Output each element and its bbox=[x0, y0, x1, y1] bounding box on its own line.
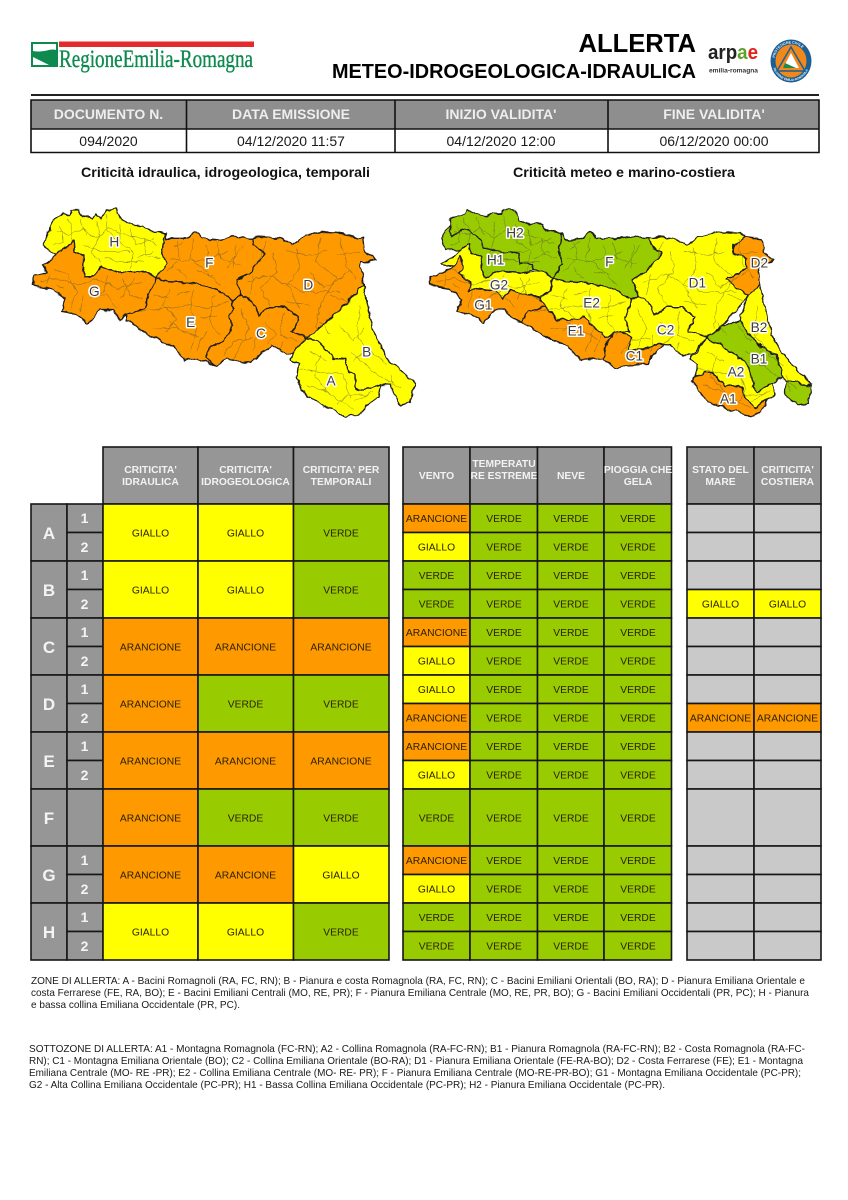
table: zone labels: 1 bbox=[81, 681, 89, 697]
table: vento, temperature estreme, neve, pioggia che gela: VERDE bbox=[553, 913, 589, 924]
heading: left map: Criticità idraulica, idrogeologica, temporali bbox=[81, 164, 370, 180]
map: criticità meteo e marino-costiera: B2 bbox=[751, 320, 767, 335]
table: vento, temperature estreme, neve, pioggia che gela: VERDE bbox=[553, 600, 589, 610]
table: idraulica, idrogeologica, temporali: GIALLO bbox=[132, 586, 169, 596]
map: criticità meteo e marino-costiera: G1 bbox=[474, 297, 492, 312]
text block: sottozone di allerta: SOTTOZONE DI ALLERTA: A1 - Montagna Romagnola (FC-RN); A2 - Collina Romagnola (RA-FC-RN); B1 - Pianura Romagnola (RA-FC-RN); B2 - Costa Romagnola (RA-FC- bbox=[29, 1044, 805, 1055]
logo: protezione civile: REGIONE EMILIA-ROMAGNA bbox=[773, 68, 808, 81]
table: zone labels: D bbox=[43, 695, 55, 714]
table: zone labels: E bbox=[43, 752, 55, 771]
map: criticità idraulica, idrogeologica, temporali: B bbox=[362, 345, 371, 360]
map: criticità meteo e marino-costiera: D1 bbox=[689, 275, 706, 290]
map: criticità meteo e marino-costiera: E1 bbox=[568, 324, 584, 339]
table: idraulica, idrogeologica, temporali: GIALLO bbox=[227, 528, 264, 540]
logo: Regione Emilia-Romagna bbox=[31, 42, 254, 73]
table: idraulica, idrogeologica, temporali: GIALLO bbox=[132, 528, 169, 540]
logo: arpae: arpae bbox=[708, 42, 758, 64]
map: criticità meteo e marino-costiera: A1 bbox=[720, 391, 737, 406]
table: vento, temperature estreme, neve, pioggia che gela: VERDE bbox=[620, 600, 656, 610]
table: zone labels: 1 bbox=[81, 567, 89, 583]
table: vento, temperature estreme, neve, pioggia che gela: VERDE bbox=[553, 542, 589, 554]
table: vento, temperature estreme, neve, pioggia che gela: VERDE bbox=[553, 656, 589, 668]
document info table bbox=[31, 100, 819, 152]
subzone F bbox=[553, 231, 662, 300]
table: vento, temperature estreme, neve, pioggia che gela: VERDE bbox=[620, 685, 656, 696]
table: vento, temperature estreme, neve, pioggia che gela bbox=[403, 447, 672, 960]
table: zone labels: 2 bbox=[81, 539, 89, 555]
table: idraulica, idrogeologica, temporali: ARANCIONE bbox=[215, 642, 276, 654]
table: idraulica, idrogeologica, temporali: ARANCIONE bbox=[120, 870, 181, 882]
table: vento, temperature estreme, neve, pioggia che gela: VERDE bbox=[553, 942, 589, 952]
table: vento, temperature estreme, neve, pioggia che gela: NEVE bbox=[557, 471, 585, 482]
subzone G1 bbox=[430, 257, 547, 323]
logo: Regione Emilia-Romagna: RegioneEmilia-Romagna bbox=[59, 46, 253, 73]
table: zone labels: 1 bbox=[81, 909, 89, 925]
document info table: 04/12/2020 11:57 bbox=[237, 133, 345, 149]
map: criticità idraulica, idrogeologica, temporali: D bbox=[303, 277, 313, 292]
map: criticità meteo e marino-costiera: G2 bbox=[490, 277, 508, 292]
table: vento, temperature estreme, neve, pioggia che gela: VERDE bbox=[553, 884, 589, 896]
map: criticità idraulica, idrogeologica, temporali: F bbox=[205, 255, 214, 270]
table: zone labels: 1 bbox=[81, 624, 89, 640]
table: idraulica, idrogeologica, temporali: IDRAULICA bbox=[122, 477, 179, 488]
table: vento, temperature estreme, neve, pioggia che gela: VENTO bbox=[419, 471, 454, 482]
document info table: 094/2020 bbox=[79, 133, 138, 149]
table: idraulica, idrogeologica, temporali: ARANCIONE bbox=[120, 642, 181, 654]
logo: arpae: emilia-romagna bbox=[709, 68, 758, 74]
table: vento, temperature estreme, neve, pioggia che gela: VERDE bbox=[553, 628, 589, 639]
table: idraulica, idrogeologica, temporali: TEMPORALI bbox=[311, 477, 371, 488]
text block: sottozone di allerta bbox=[29, 1044, 805, 1091]
subzone B1 bbox=[707, 320, 812, 405]
table: idraulica, idrogeologica, temporali: VERDE bbox=[323, 528, 359, 540]
table: stato del mare, criticità costiera: ARANCIONE bbox=[690, 714, 751, 724]
table: idraulica, idrogeologica, temporali: IDROGEOLOGICA bbox=[201, 477, 290, 488]
header rule bbox=[31, 94, 819, 96]
table: vento, temperature estreme, neve, pioggia che gela: VERDE bbox=[620, 770, 656, 782]
table: idraulica, idrogeologica, temporali: GIALLO bbox=[132, 928, 169, 938]
table: vento, temperature estreme, neve, pioggia che gela: VERDE bbox=[553, 814, 589, 824]
map: criticità idraulica, idrogeologica, temporali: C bbox=[256, 326, 266, 341]
document info table: FINE VALIDITA' bbox=[663, 106, 765, 122]
table: vento, temperature estreme, neve, pioggia che gela: PIOGGIA CHE bbox=[604, 465, 672, 476]
table: idraulica, idrogeologica, temporali: ARANCIONE bbox=[310, 756, 372, 768]
table: vento, temperature estreme, neve, pioggia che gela: GIALLO bbox=[418, 770, 455, 782]
heading: right map: Criticità meteo e marino-costiera bbox=[513, 164, 735, 180]
table: vento, temperature estreme, neve, pioggia che gela: VERDE bbox=[486, 600, 522, 610]
map: criticità meteo e marino-costiera: E2 bbox=[583, 295, 600, 310]
table: zone labels: 2 bbox=[81, 881, 89, 897]
table: vento, temperature estreme, neve, pioggia che gela: VERDE bbox=[486, 656, 522, 668]
table: vento, temperature estreme, neve, pioggia che gela: VERDE bbox=[553, 514, 589, 525]
table: zone labels: B bbox=[43, 581, 55, 600]
table: vento, temperature estreme, neve, pioggia che gela: VERDE bbox=[486, 514, 522, 525]
table: zone labels: 2 bbox=[81, 596, 89, 612]
table: vento, temperature estreme, neve, pioggia che gela: VERDE bbox=[553, 714, 589, 724]
subzone B2 bbox=[740, 285, 812, 387]
table: zone labels: 1 bbox=[81, 510, 89, 526]
table: stato del mare, criticità costiera: CRITICITA' bbox=[761, 465, 814, 476]
table: idraulica, idrogeologica, temporali bbox=[103, 447, 389, 960]
zone F bbox=[157, 232, 265, 300]
table: vento, temperature estreme, neve, pioggia che gela: VERDE bbox=[486, 628, 522, 639]
table: zone labels: 1 bbox=[81, 852, 89, 868]
table: idraulica, idrogeologica, temporali: ARANCIONE bbox=[120, 814, 181, 824]
table: vento, temperature estreme, neve, pioggia che gela: VERDE bbox=[419, 913, 454, 924]
subzone D2 bbox=[727, 237, 773, 295]
title bbox=[332, 30, 696, 83]
table: vento, temperature estreme, neve, pioggia che gela: GIALLO bbox=[418, 884, 455, 896]
table: zone labels: 2 bbox=[81, 653, 89, 669]
table: idraulica, idrogeologica, temporali: GIALLO bbox=[322, 870, 360, 882]
table: stato del mare, criticità costiera: ARANCIONE bbox=[757, 714, 818, 724]
table: vento, temperature estreme, neve, pioggia che gela: ARANCIONE bbox=[406, 628, 467, 639]
table: idraulica, idrogeologica, temporali: VERDE bbox=[323, 586, 359, 596]
table: vento, temperature estreme, neve, pioggia che gela: RE ESTREME bbox=[471, 471, 538, 482]
table: stato del mare, criticità costiera: MARE bbox=[705, 477, 736, 488]
table: vento, temperature estreme, neve, pioggia che gela: GIALLO bbox=[418, 656, 455, 668]
table: vento, temperature estreme, neve, pioggia che gela: VERDE bbox=[486, 913, 522, 924]
map: criticità meteo e marino-costiera: A2 bbox=[728, 365, 744, 380]
table: vento, temperature estreme, neve, pioggia che gela: VERDE bbox=[620, 542, 656, 554]
table: vento, temperature estreme, neve, pioggia che gela: VERDE bbox=[620, 571, 656, 582]
subzone C1 bbox=[603, 332, 665, 368]
map: criticità idraulica, idrogeologica, temporali: E bbox=[186, 315, 195, 330]
title: ALLERTA bbox=[578, 30, 696, 58]
table: vento, temperature estreme, neve, pioggia che gela: VERDE bbox=[620, 884, 656, 896]
table: zone labels: A bbox=[43, 524, 55, 543]
document info table: DATA EMISSIONE bbox=[232, 106, 350, 122]
map: criticità meteo e marino-costiera bbox=[430, 209, 812, 417]
map: criticità idraulica, idrogeologica, temporali: H bbox=[109, 235, 119, 250]
table: vento, temperature estreme, neve, pioggia che gela: VERDE bbox=[620, 656, 656, 668]
table: vento, temperature estreme, neve, pioggia che gela: ARANCIONE bbox=[406, 856, 467, 867]
table: zone labels: 1 bbox=[81, 738, 89, 754]
table: vento, temperature estreme, neve, pioggia che gela: VERDE bbox=[419, 600, 454, 610]
zone A bbox=[292, 337, 382, 417]
subzone A1 bbox=[692, 372, 767, 417]
table: zone labels: G bbox=[42, 866, 56, 885]
table: vento, temperature estreme, neve, pioggia che gela: VERDE bbox=[553, 742, 589, 753]
logo: protezione civile bbox=[770, 40, 812, 82]
map: criticità meteo e marino-costiera: B1 bbox=[751, 351, 767, 366]
table: idraulica, idrogeologica, temporali: VERDE bbox=[228, 814, 263, 824]
text block: zone di allerta bbox=[31, 976, 809, 1011]
map: criticità idraulica, idrogeologica, temporali: A bbox=[326, 374, 336, 389]
table: idraulica, idrogeologica, temporali: CRITICITA' PER bbox=[303, 465, 380, 476]
table: vento, temperature estreme, neve, pioggia che gela: VERDE bbox=[620, 714, 656, 724]
subzone H2 bbox=[450, 209, 563, 278]
map: criticità meteo e marino-costiera: C2 bbox=[657, 322, 674, 337]
table: zone labels: 2 bbox=[81, 767, 89, 783]
map: criticità idraulica, idrogeologica, temporali: G bbox=[89, 284, 100, 299]
table: vento, temperature estreme, neve, pioggia che gela: VERDE bbox=[486, 542, 522, 554]
table: vento, temperature estreme, neve, pioggia che gela: VERDE bbox=[419, 571, 454, 582]
table: zone labels: F bbox=[44, 809, 54, 828]
table: stato del mare, criticità costiera: COSTIERA bbox=[761, 477, 815, 488]
table: idraulica, idrogeologica, temporali: ARANCIONE bbox=[120, 756, 181, 768]
table: vento, temperature estreme, neve, pioggia che gela: VERDE bbox=[486, 714, 522, 724]
table: idraulica, idrogeologica, temporali: ARANCIONE bbox=[120, 700, 181, 710]
table: zone labels: 2 bbox=[81, 938, 89, 954]
map: criticità meteo e marino-costiera: C1 bbox=[626, 349, 643, 364]
subzone D1 bbox=[632, 232, 748, 337]
subzone A2 bbox=[690, 337, 775, 408]
table: vento, temperature estreme, neve, pioggia che gela: VERDE bbox=[486, 571, 522, 582]
table: stato del mare, criticità costiera: GIALLO bbox=[702, 600, 739, 610]
document info table: DOCUMENTO N. bbox=[54, 106, 163, 122]
table: zone labels: 2 bbox=[81, 710, 89, 726]
table: idraulica, idrogeologica, temporali: GIALLO bbox=[227, 586, 264, 596]
table: vento, temperature estreme, neve, pioggia che gela: VERDE bbox=[620, 856, 656, 867]
table: vento, temperature estreme, neve, pioggia che gela: VERDE bbox=[486, 685, 522, 696]
table: vento, temperature estreme, neve, pioggia che gela: ARANCIONE bbox=[406, 742, 467, 753]
table: idraulica, idrogeologica, temporali: VERDE bbox=[323, 700, 359, 710]
map: criticità idraulica, idrogeologica, temporali bbox=[33, 209, 415, 417]
table: idraulica, idrogeologica, temporali: ARANCIONE bbox=[310, 642, 372, 654]
table: vento, temperature estreme, neve, pioggia che gela: VERDE bbox=[620, 814, 656, 824]
zone H bbox=[43, 209, 167, 278]
text block: zone di allerta: e bassa collina Emiliana Occidentale (PR, PC). bbox=[31, 1000, 240, 1011]
table: idraulica, idrogeologica, temporali: VERDE bbox=[323, 814, 359, 824]
table: vento, temperature estreme, neve, pioggia che gela: VERDE bbox=[553, 770, 589, 782]
zone G bbox=[33, 242, 157, 323]
table: vento, temperature estreme, neve, pioggia che gela: VERDE bbox=[419, 814, 454, 824]
table: idraulica, idrogeologica, temporali: CRITICITA' bbox=[124, 465, 177, 476]
table: vento, temperature estreme, neve, pioggia che gela: VERDE bbox=[486, 814, 522, 824]
text block: zone di allerta: ZONE DI ALLERTA: A - Bacini Romagnoli (RA, FC, RN); B - Pianura e costa Romagnola (RA, FC, RN); C - Bacini Emiliani Orientali (BO, RA); D - Pianura Emiliana Orientale e bbox=[31, 976, 805, 987]
table: vento, temperature estreme, neve, pioggia che gela: GELA bbox=[624, 477, 653, 488]
table: vento, temperature estreme, neve, pioggia che gela: VERDE bbox=[419, 942, 454, 952]
zone E bbox=[127, 278, 233, 367]
table: vento, temperature estreme, neve, pioggia che gela: VERDE bbox=[553, 685, 589, 696]
subzone E2 bbox=[540, 278, 630, 338]
table: vento, temperature estreme, neve, pioggia che gela: VERDE bbox=[620, 942, 656, 952]
table: zone labels: H bbox=[43, 923, 55, 942]
table: idraulica, idrogeologica, temporali: ARANCIONE bbox=[215, 756, 276, 768]
table: zone labels bbox=[31, 504, 103, 960]
subzone H1 bbox=[442, 225, 533, 278]
table: vento, temperature estreme, neve, pioggia che gela: VERDE bbox=[553, 571, 589, 582]
text block: sottozone di allerta: G2 - Alta Collina Emiliana Occidentale (PC-PR); H1 - Bassa Collina Emiliana Occidentale (PC-PR); H2 - Pianura Emiliana Occidentale (PC-PR). bbox=[29, 1080, 665, 1091]
map: criticità meteo e marino-costiera: H2 bbox=[506, 226, 524, 241]
table: stato del mare, criticità costiera: STATO DEL bbox=[692, 465, 749, 476]
table: vento, temperature estreme, neve, pioggia che gela: GIALLO bbox=[418, 685, 455, 696]
table: vento, temperature estreme, neve, pioggia che gela: ARANCIONE bbox=[406, 714, 467, 724]
table: vento, temperature estreme, neve, pioggia che gela: VERDE bbox=[486, 770, 522, 782]
subzone C2 bbox=[622, 295, 707, 355]
table: vento, temperature estreme, neve, pioggia che gela: TEMPERATU bbox=[472, 459, 536, 470]
table: idraulica, idrogeologica, temporali: ARANCIONE bbox=[215, 870, 276, 882]
map: criticità meteo e marino-costiera: H1 bbox=[487, 252, 504, 267]
subzone G2 bbox=[440, 243, 553, 298]
text block: sottozone di allerta: RN); C1 - Montagna Emiliana Orientale (BO); C2 - Collina Emiliana Orientale (BO-RA); D1 - Pianura Emiliana Orientale (FE-RA-BO); D2 - Costa Ferrarese (FE); E1 - Montagna bbox=[29, 1056, 803, 1067]
subzone E1 bbox=[522, 307, 613, 360]
table: vento, temperature estreme, neve, pioggia che gela: VERDE bbox=[486, 742, 522, 753]
table: vento, temperature estreme, neve, pioggia che gela: VERDE bbox=[486, 884, 522, 896]
title: METEO-IDROGEOLOGICA-IDRAULICA bbox=[332, 61, 696, 83]
document info table: 06/12/2020 00:00 bbox=[660, 133, 769, 149]
text block: sottozone di allerta: Emiliana Centrale (MO- RE -PR); E2 - Collina Emiliana Centrale (MO- RE- PR); F - Pianura Emiliana Centrale (MO-RE-PR-BO); G1 - Montagna Emiliana Occidentale (PC-PR); bbox=[29, 1068, 801, 1079]
table: stato del mare, criticità costiera: GIALLO bbox=[769, 600, 806, 610]
table: vento, temperature estreme, neve, pioggia che gela: VERDE bbox=[620, 913, 656, 924]
table: idraulica, idrogeologica, temporali: VERDE bbox=[323, 928, 359, 938]
table: idraulica, idrogeologica, temporali: GIALLO bbox=[227, 928, 264, 938]
table: stato del mare, criticità costiera bbox=[687, 447, 821, 960]
table: vento, temperature estreme, neve, pioggia che gela: ARANCIONE bbox=[406, 514, 467, 525]
zone B bbox=[307, 285, 415, 405]
table: idraulica, idrogeologica, temporali: CRITICITA' bbox=[219, 465, 272, 476]
zone C bbox=[207, 295, 307, 367]
table: vento, temperature estreme, neve, pioggia che gela: VERDE bbox=[553, 856, 589, 867]
document info table: 04/12/2020 12:00 bbox=[446, 133, 556, 149]
document info table: INIZIO VALIDITA' bbox=[446, 106, 556, 122]
text block: zone di allerta: costa Ferrarese (FE, RA, BO); E - Bacini Emiliani Centrali (MO, RE, PR); F - Pianura Emiliana Centrale (MO, RE, PR, BO); G - Bacini Emiliani Occidentali (PR, PC); H - Pianura bbox=[31, 988, 809, 999]
table: vento, temperature estreme, neve, pioggia che gela: VERDE bbox=[486, 942, 522, 952]
table: vento, temperature estreme, neve, pioggia che gela: VERDE bbox=[620, 742, 656, 753]
map: criticità meteo e marino-costiera: F bbox=[605, 255, 614, 270]
table: vento, temperature estreme, neve, pioggia che gela: VERDE bbox=[620, 514, 656, 525]
table: vento, temperature estreme, neve, pioggia che gela: GIALLO bbox=[418, 542, 455, 554]
table: idraulica, idrogeologica, temporali: VERDE bbox=[228, 700, 263, 710]
table: vento, temperature estreme, neve, pioggia che gela: VERDE bbox=[486, 856, 522, 867]
zone D bbox=[237, 232, 377, 337]
logo: protezione civile: PROTEZIONE CIVILE bbox=[772, 41, 804, 58]
logo: arpae bbox=[708, 42, 758, 74]
map: criticità meteo e marino-costiera: D2 bbox=[751, 256, 768, 271]
table: vento, temperature estreme, neve, pioggia che gela: VERDE bbox=[620, 628, 656, 639]
table: zone labels: C bbox=[43, 638, 55, 657]
